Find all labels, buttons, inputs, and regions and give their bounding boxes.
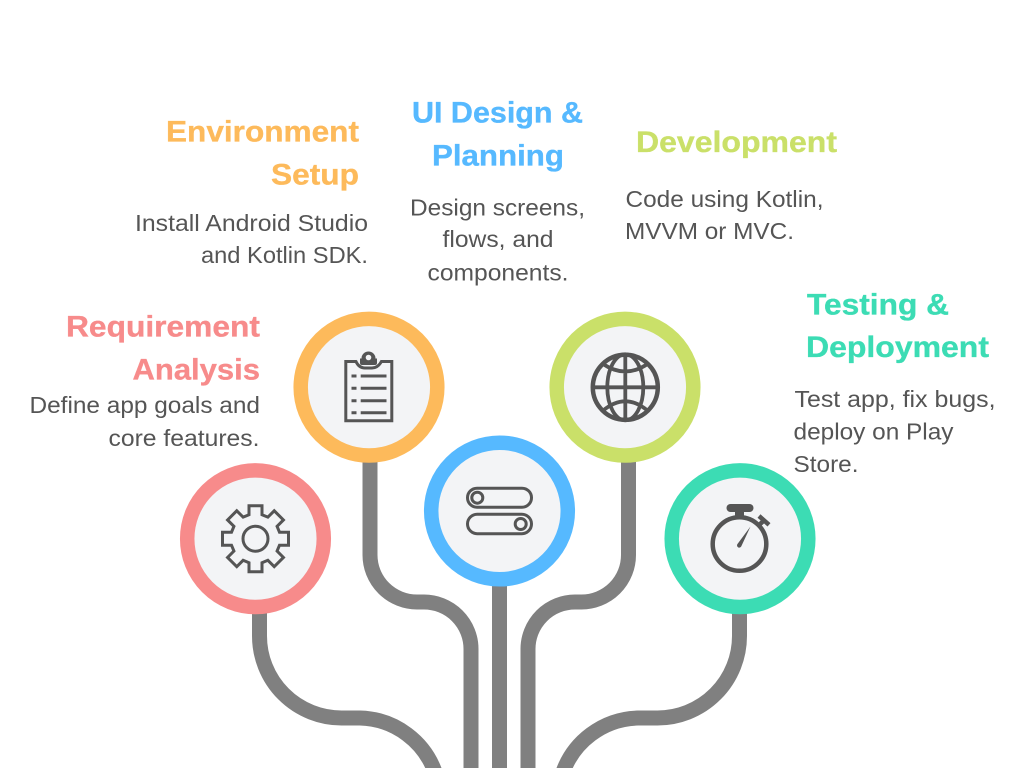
node ring: orange	[301, 319, 437, 456]
heading: Deployment	[806, 331, 989, 364]
node ring: green	[557, 319, 693, 456]
node ring: red	[187, 470, 324, 607]
step: UI design node	[431, 443, 568, 579]
text: environment setup	[135, 116, 368, 268]
heading: Development	[636, 126, 837, 159]
icon: globe	[592, 354, 658, 420]
heading: Testing &	[807, 288, 949, 322]
description: Design screens,	[410, 194, 585, 220]
step: requirement analysis node	[187, 470, 324, 607]
connector: development	[528, 455, 628, 768]
connector: requirement analysis	[260, 605, 436, 768]
icon: gear	[222, 506, 288, 572]
step: environment setup node	[301, 319, 437, 456]
description: deploy on Play	[794, 419, 954, 445]
heading	[412, 97, 583, 172]
heading: Analysis	[132, 354, 260, 387]
description	[794, 386, 996, 477]
text: UI design and planning	[410, 97, 585, 285]
node ring: teal	[672, 470, 808, 607]
description	[30, 392, 260, 451]
description: Store.	[794, 451, 858, 477]
description: Test app, fix bugs,	[794, 386, 996, 412]
description: Define app goals and	[30, 392, 260, 418]
description	[625, 186, 824, 244]
icon: stopwatch	[713, 504, 769, 571]
heading: Setup	[271, 158, 359, 192]
heading: Environment	[166, 116, 359, 149]
connectors	[260, 455, 740, 768]
icon: clipboard	[346, 352, 392, 421]
description: MVVM or MVC.	[625, 218, 794, 244]
description: Code using Kotlin,	[626, 186, 824, 212]
description: and Kotlin SDK.	[201, 242, 368, 268]
connector: UI design	[492, 580, 507, 768]
text: requirement analysis	[30, 311, 260, 451]
connector: environment setup	[370, 455, 471, 768]
step: testing node	[672, 470, 808, 607]
heading	[806, 288, 989, 364]
description	[410, 194, 585, 285]
heading	[166, 116, 359, 192]
text: development	[625, 126, 837, 244]
heading	[66, 311, 260, 387]
heading: Planning	[432, 139, 564, 172]
description: Install Android Studio	[135, 210, 368, 236]
description: core features.	[108, 425, 260, 451]
step: development node	[557, 319, 693, 456]
connector: testing	[562, 605, 740, 768]
description: flows, and	[442, 226, 554, 252]
heading: Requirement	[66, 311, 260, 344]
node ring: blue	[431, 443, 568, 579]
description: components.	[428, 259, 568, 285]
text: testing and deployment	[794, 288, 996, 477]
heading: UI Design &	[412, 97, 583, 130]
icon: toggles	[468, 488, 532, 534]
description	[135, 210, 368, 268]
